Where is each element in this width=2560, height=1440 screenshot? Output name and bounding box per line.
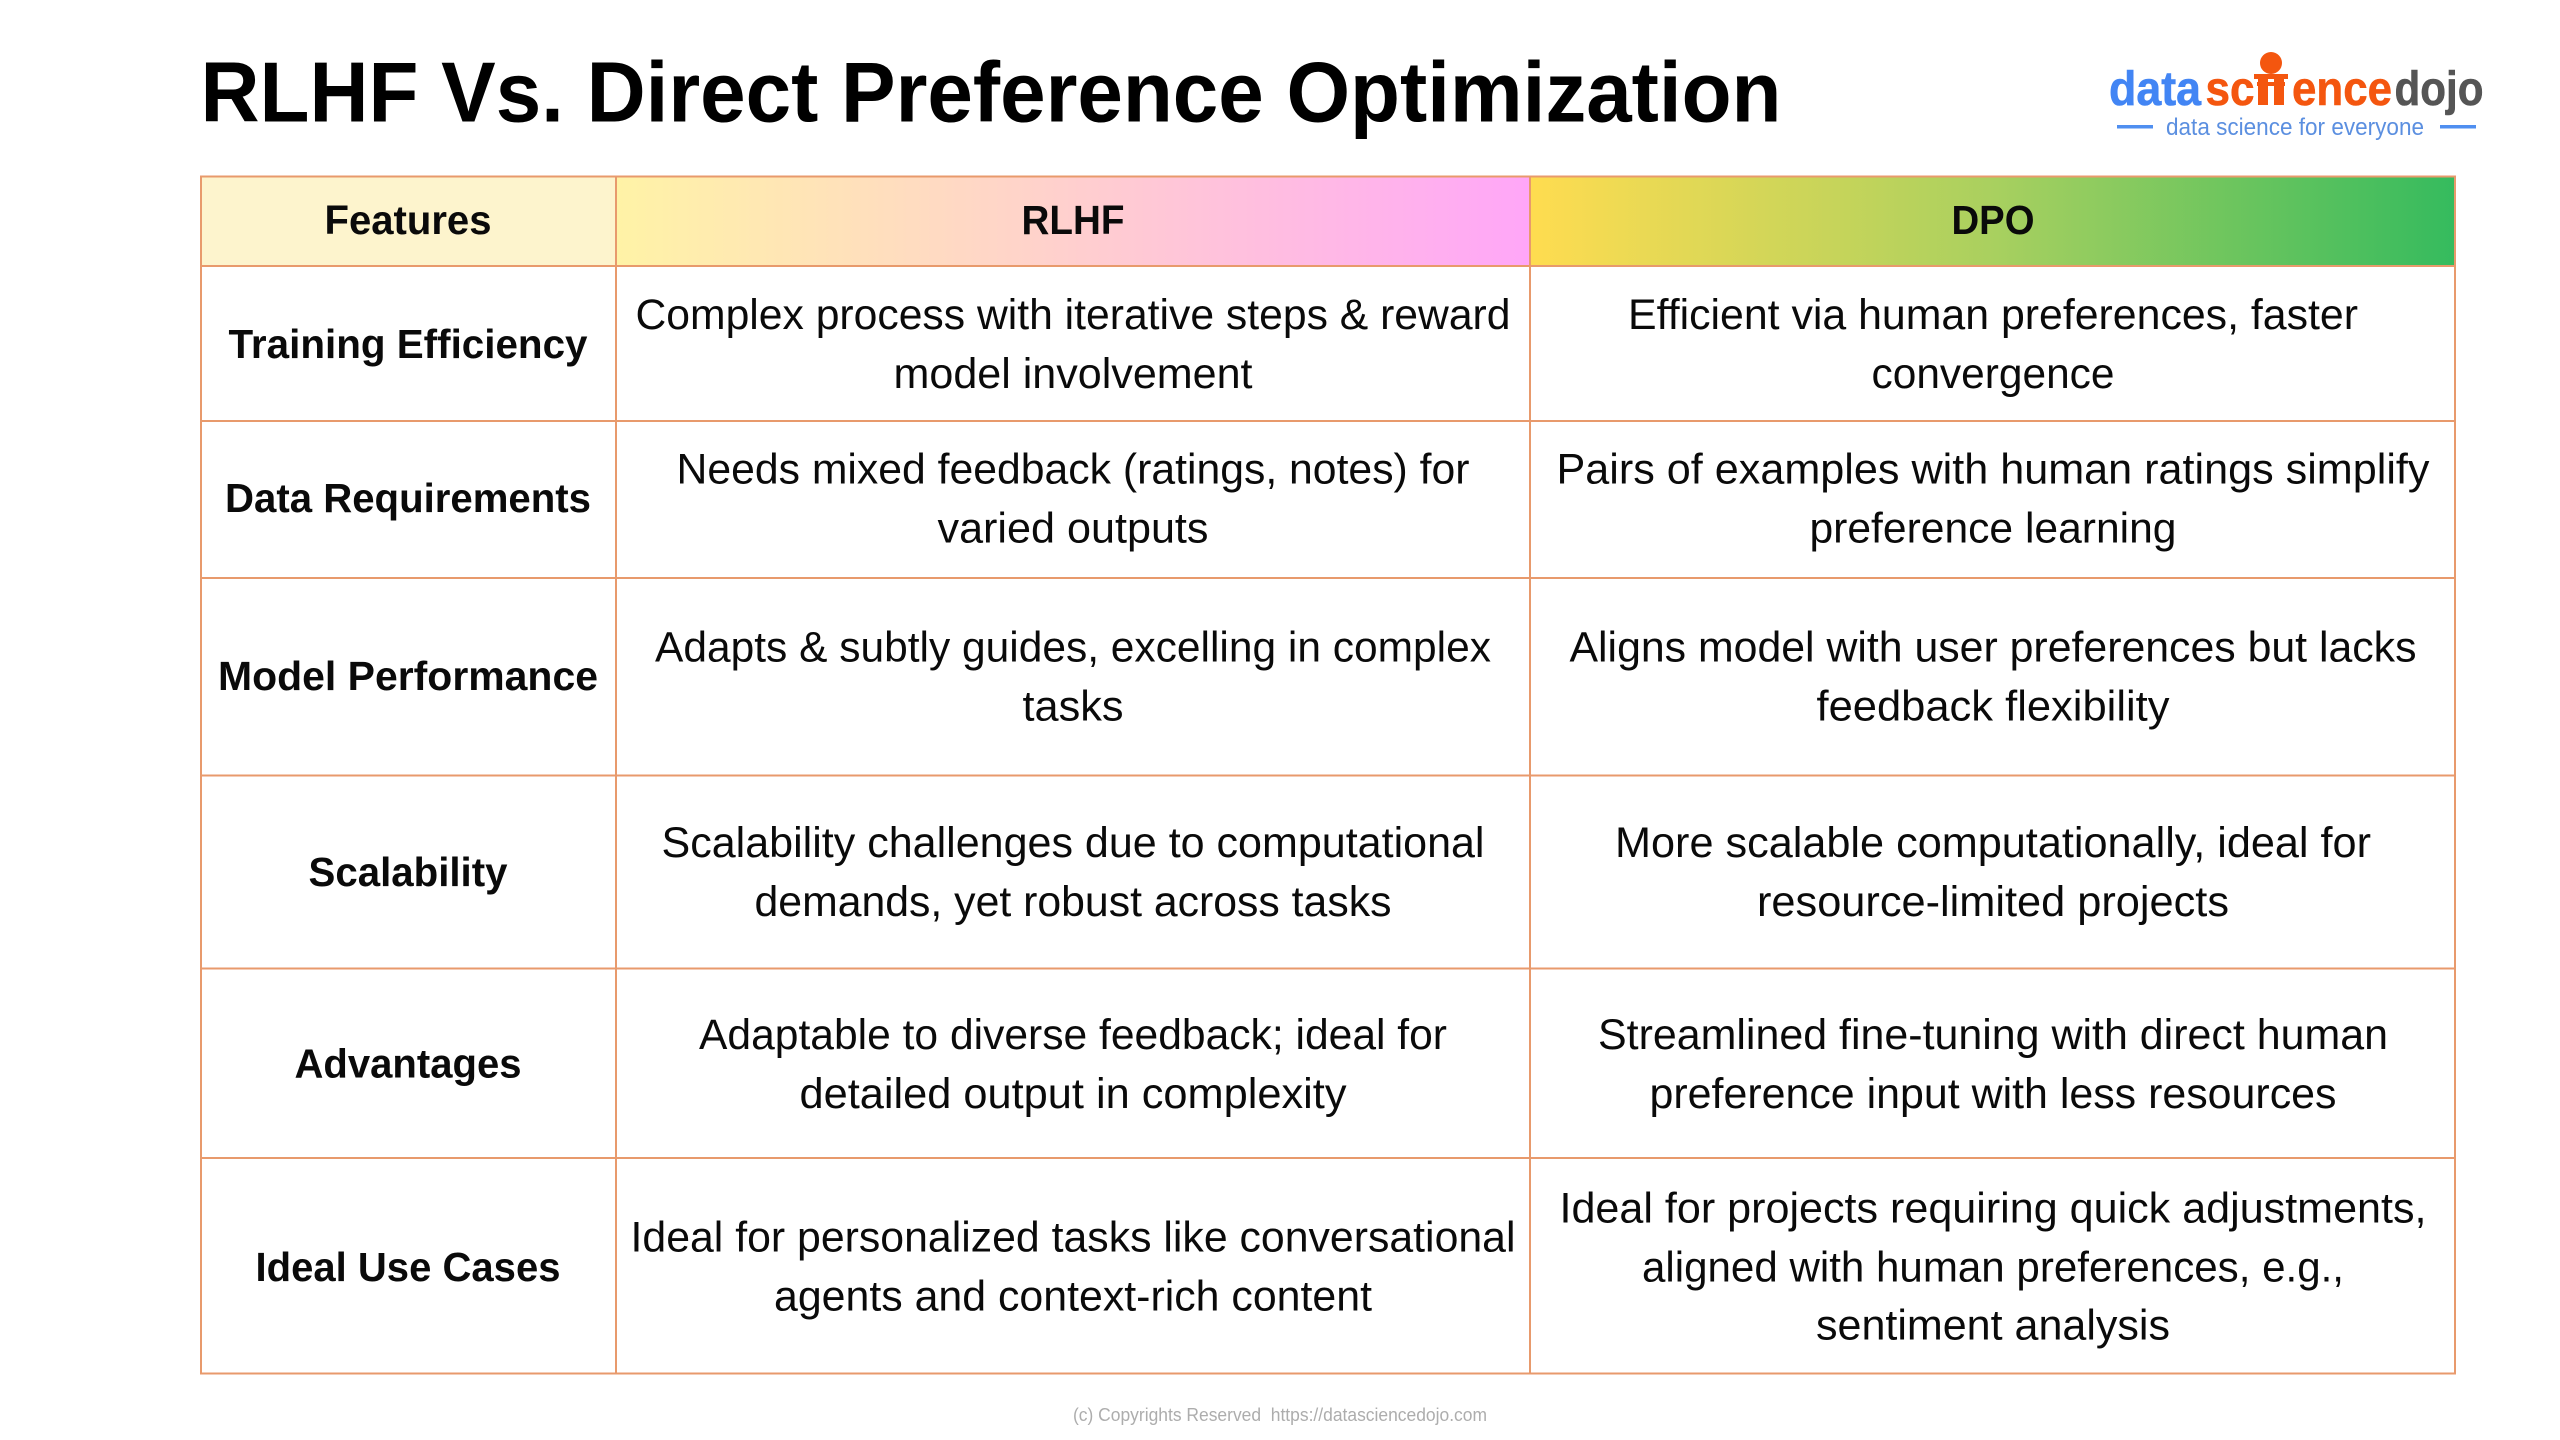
row: Ideal Use Cases (256, 1184, 2426, 1350)
row: Model Performance: Aligns model with user preferences but lacks (1570, 624, 2416, 672)
row: Data Requirements: Data Requirements (225, 475, 591, 521)
row: Training Efficiency: convergence (1872, 350, 2114, 398)
row: Ideal Use Cases: aligned with human preferences, e.g., (1642, 1244, 2344, 1292)
row: Training Efficiency (228, 291, 2358, 398)
row: Data Requirements: Needs mixed feedback (ratings, notes) for (676, 446, 1470, 494)
header cell: DPO (1530, 176, 2455, 266)
row: Ideal Use Cases: Ideal for projects requiring quick adjustments, (1560, 1184, 2426, 1232)
row: Scalability: Scalability (308, 849, 508, 895)
row: Training Efficiency: model involvement (894, 350, 1253, 398)
row: Scalability: demands, yet robust across tasks (754, 878, 1392, 926)
row: Model Performance: Adapts & subtly guides, excelling in complex (655, 624, 1491, 672)
header cell: RLHF (616, 176, 1530, 266)
logo wordmark (2109, 63, 2484, 116)
row: Training Efficiency: Efficient via human preferences, faster (1628, 291, 2358, 339)
footer copyright: (c) Copyrights Reserved https://datasciencedojo.com (1073, 1405, 1487, 1425)
row: Advantages: preference input with less resources (1650, 1070, 2336, 1118)
row: Scalability (308, 819, 2371, 926)
row: Training Efficiency: Training Efficiency (228, 321, 588, 367)
row: Data Requirements: Pairs of examples with human ratings simplify (1556, 446, 2430, 494)
row: Ideal Use Cases: Ideal Use Cases (256, 1244, 560, 1290)
row: Ideal Use Cases: sentiment analysis (1816, 1302, 2170, 1350)
row: Model Performance: Model Performance (218, 653, 598, 699)
row: Data Requirements (225, 446, 2430, 552)
row: Data Requirements: varied outputs (938, 504, 1208, 552)
row: Training Efficiency: Complex process with iterative steps & reward (636, 291, 1510, 339)
logo wordmark: dojo (2394, 63, 2484, 116)
row: Scalability: Scalability challenges due to computational (662, 819, 1484, 867)
row: Model Performance (218, 624, 2416, 730)
header cell: Features: Features (324, 197, 492, 243)
title: RLHF Vs. Direct Preference Optimization (200, 46, 1782, 140)
logo tagline: data science for everyone (2166, 114, 2424, 141)
icon: torii gate with circle (2254, 52, 2288, 105)
row: Ideal Use Cases: agents and context-rich content (774, 1272, 1372, 1320)
row: Advantages: detailed output in complexity (800, 1070, 1347, 1118)
row: Advantages: Advantages (294, 1040, 522, 1086)
row: Ideal Use Cases: Ideal for personalized tasks like conversational (630, 1214, 1516, 1262)
row: Model Performance: feedback flexibility (1816, 682, 2170, 730)
row: Advantages (294, 1011, 2388, 1118)
logo wordmark: ence (2292, 63, 2392, 116)
row: Model Performance: tasks (1022, 682, 1124, 730)
header cell: RLHF: RLHF (1022, 197, 1124, 243)
comparison table (201, 176, 2455, 1374)
row: Scalability: More scalable computationally, ideal for (1615, 819, 2371, 867)
logo: data science dojo (2109, 52, 2484, 141)
header cell: DPO: DPO (1952, 197, 2034, 243)
header cell: Features (201, 176, 616, 266)
row: Advantages: Adaptable to diverse feedback; ideal for (699, 1011, 1447, 1059)
row: Data Requirements: preference learning (1810, 504, 2176, 552)
logo wordmark: sc (2206, 63, 2254, 116)
logo wordmark: data (2109, 63, 2201, 116)
row: Advantages: Streamlined fine-tuning with direct human (1598, 1011, 2388, 1059)
row: Scalability: resource-limited projects (1757, 878, 2229, 926)
